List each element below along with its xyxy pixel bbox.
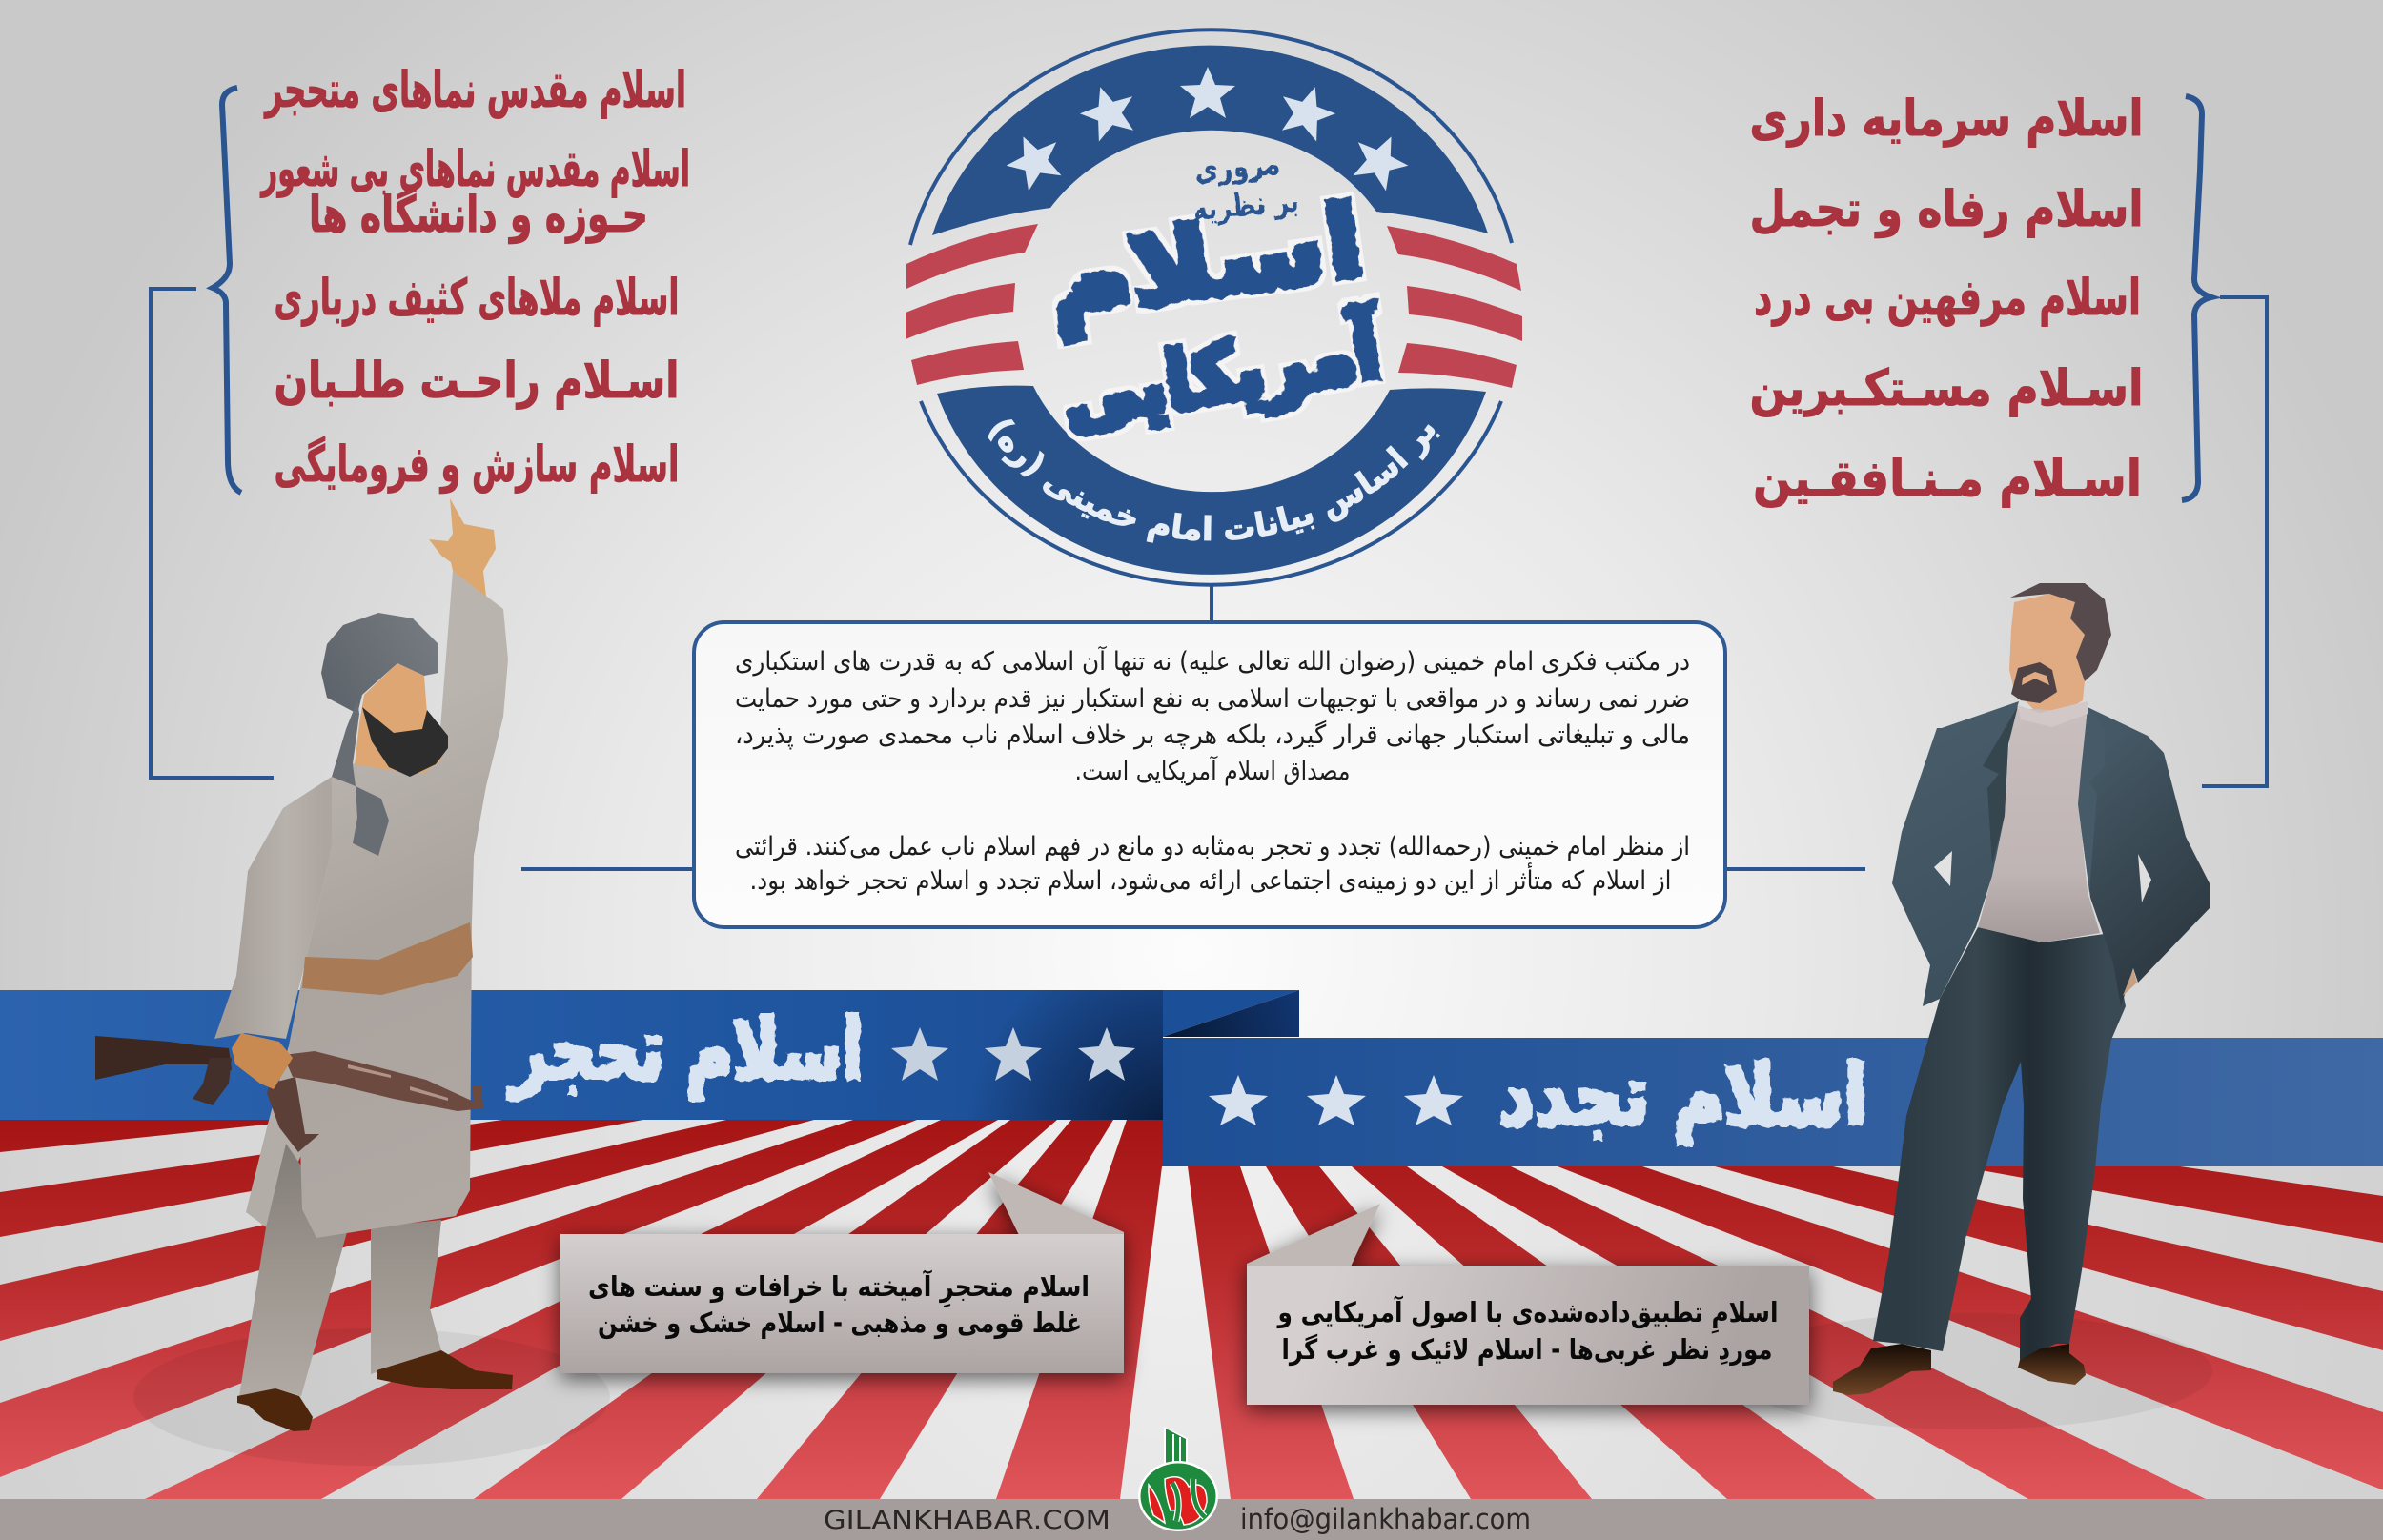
footer site name: GILANKHABAR.COM (824, 1506, 1110, 1535)
central text box: ضرر نمی رساند و در مواقعی با توجیهات اسلامی به نفع استکبار نیز قدم بردارد و حتی مورد حمایت (735, 684, 1690, 714)
ground shadow: right figure (1724, 1313, 2212, 1429)
robe back flap (246, 1045, 315, 1229)
emblem top crescent (932, 46, 1488, 235)
rifle (95, 1036, 483, 1152)
central text box: از اسلام که متأثر از این دو زمینه‌ی اجتماعی ارائه می‌شود، اسلام تجدد و اسلام تحجر خواهد بود. (749, 861, 1672, 896)
central text box: از منظر امام خمینی (رحمه‌الله) تجدد و تحجر به‌مثابه دو مانع در فهم اسلام ناب عمل می‌کنند. قرائتی (735, 832, 1690, 861)
banner title left: اسلام تحجر (508, 1001, 864, 1100)
left list of items (259, 62, 690, 494)
footer logo (1138, 1427, 1218, 1531)
robe torso and raised arm (289, 571, 508, 1238)
shoes (237, 1388, 313, 1431)
connector: left figure to box (521, 867, 694, 871)
left list of items: اسلام مقدس نماهای متحجر (263, 62, 686, 119)
right list of items: اسلام مرفهین بی درد (1754, 270, 2141, 327)
right list of items: اسـلام مسـتکـبرین (1750, 360, 2143, 417)
callout right (1247, 1204, 1809, 1405)
left list of items: اسلام سازش و فرومایگی (275, 436, 679, 494)
connector: right figure to box (1725, 867, 1865, 871)
central text box (694, 622, 1725, 927)
emblem bottom crescent (937, 386, 1486, 575)
striped floor (0, 1120, 2383, 1499)
neck and face (355, 663, 441, 774)
callout left (560, 1172, 1124, 1373)
banner: taghajor (0, 990, 1299, 1120)
emblem stripes (906, 224, 1522, 388)
emblem main title: اسلام (1041, 182, 1371, 341)
emblem stars (998, 67, 1416, 195)
beard (362, 707, 448, 777)
emblem subtitle: مروری (1193, 145, 1282, 189)
callout left: غلط قومی و مذهبی - اسلام خشک و خشن (598, 1307, 1082, 1339)
lapels (1983, 706, 2018, 864)
callout left: اسلام متحجرِ آمیخته با خرافات و سنت های (588, 1269, 1090, 1307)
jacket right (2081, 707, 2210, 1006)
right list of items: اسلام سرمایه داری (1750, 91, 2143, 148)
left list of items: اسلام ملاهای کثیف درباری (275, 270, 679, 327)
footer bar (0, 1499, 2383, 1540)
figure: traditionalist with rifle (95, 498, 513, 1431)
footer email: info@gilankhabar.com (1240, 1503, 1531, 1535)
left list of items: اسـلام راحـت طلـبان (275, 353, 679, 410)
left brace and connector (151, 88, 274, 778)
ground shadow: left figure (133, 1328, 610, 1466)
collar (2018, 701, 2088, 727)
hair (2010, 583, 2111, 681)
trousers (1873, 927, 2126, 1360)
emblem outer rings (910, 30, 1512, 245)
turban (321, 613, 438, 714)
right list of items: اسـلام مـنـافقـین (1753, 451, 2142, 508)
emblem subtitle: بر نظریه (1192, 182, 1300, 228)
left list of items: اسلام مقدس نماهای بی شعور (259, 141, 690, 198)
left list of items: حـوزه و دانشگاه ها (309, 186, 648, 244)
face (2009, 594, 2085, 711)
emblem curved caption: بر اساس بیانات امام خمینی (ره) (988, 419, 1440, 543)
belt (302, 922, 473, 995)
emblem main title (1041, 182, 1389, 446)
callout right: موردِ نظر غربی‌ها - اسلام لائیک و غرب گرا (1281, 1333, 1773, 1366)
trousers (239, 1144, 347, 1396)
emblem subtitle (1192, 145, 1300, 228)
stem from emblem to text box (1210, 584, 1213, 624)
goatee (2011, 662, 2057, 703)
shirt (1978, 709, 2100, 942)
right brace and connector (2182, 96, 2267, 786)
robe sleeve (214, 777, 332, 1039)
gripping hand (232, 1033, 293, 1089)
banner title right: اسلام تجدد (1499, 1046, 1867, 1145)
central text box: مالی و تبلیغاتی استکبار جهانی قرار گیرد، بلکه هرچه بر خلاف اسلام ناب محمدی صورت پذیرد، (735, 719, 1690, 750)
right list of items: اسلام رفاه و تجمل (1750, 181, 2143, 238)
central emblem (906, 28, 1522, 587)
banner stars left (891, 1027, 1135, 1081)
callout right: اسلامِ تطبیق‌داده‌شده‌ی با اصول آمریکایی و (1276, 1295, 1779, 1333)
figure: modernist in suit (1833, 583, 2210, 1395)
shoes (1833, 1344, 1931, 1395)
banner: tajaddod (1163, 1038, 2383, 1166)
scarf (332, 700, 389, 856)
banner stars right (1209, 1075, 1463, 1125)
right list of items (1750, 91, 2143, 508)
pocket hand (2123, 969, 2137, 996)
raised hand (429, 498, 496, 597)
central text box: در مکتب فکری امام خمینی (رضوان الله تعالی علیه) نه تنها آن اسلامی که به قدرت های استکباری (735, 646, 1690, 677)
jacket left (1892, 701, 2019, 1006)
central text box: مصداق اسلام آمریکایی است. (1075, 756, 1350, 786)
emblem main title: آمریکایی (1056, 299, 1389, 446)
